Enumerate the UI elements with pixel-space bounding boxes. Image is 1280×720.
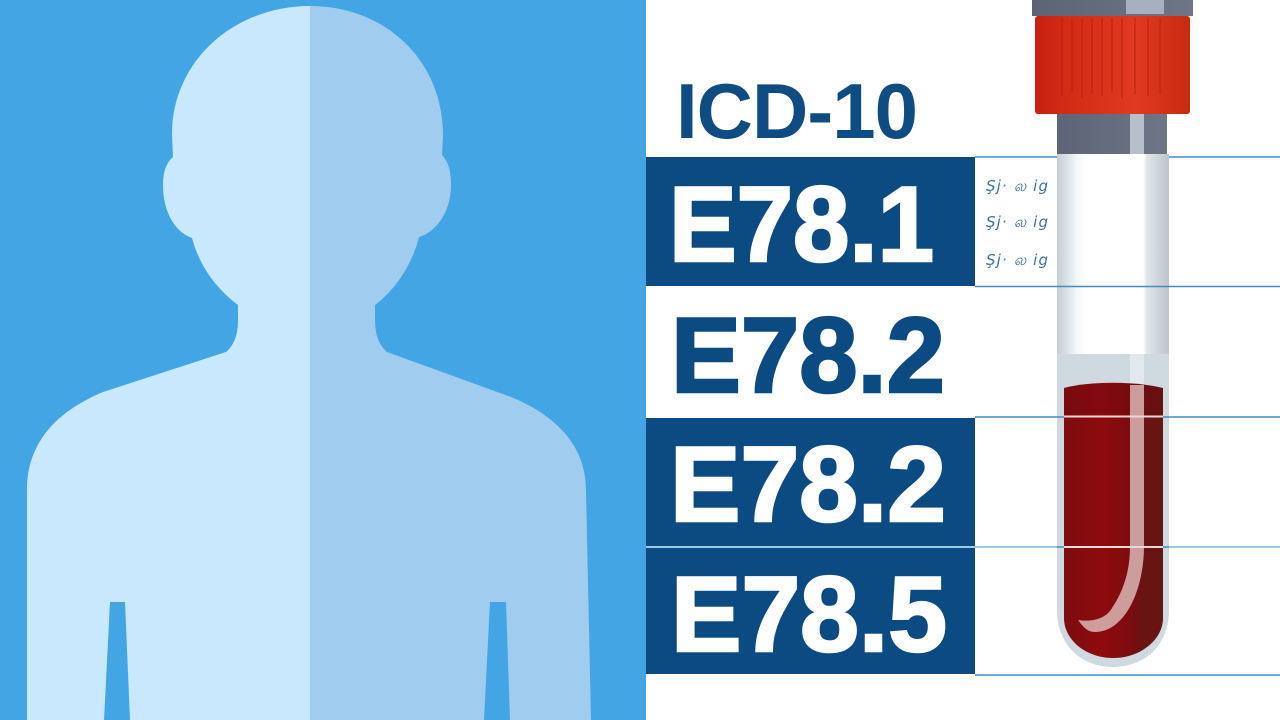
text block: small annotations [986,177,1048,269]
heading: ICD-10: ICD-10 [676,67,918,155]
line across glass [1057,286,1169,547]
row: E78.1: E78.1 [669,164,934,284]
red cap [1035,16,1190,114]
panel: code table [646,157,975,674]
stopper neck [1057,113,1167,154]
row: E78.2 highlighted: E78.2 [670,424,946,544]
icon: blood test tube [1032,0,1193,667]
blood [1064,383,1163,658]
icon: human silhouette [27,6,591,720]
gray top [1032,0,1193,16]
glass highlight [1078,385,1144,632]
tube glass [1057,354,1169,667]
text block: small annotations: Şj· ல ig [986,251,1048,269]
text block: small annotations: Şj· ல ig [986,213,1048,231]
lines showing through blood [1064,416,1163,547]
text block: small annotations: Şj· ல ig [986,177,1048,195]
row: E78.5: E78.5 [671,554,947,674]
panel: blue background [0,0,646,720]
row: E78.2: E78.2 [671,295,945,415]
table lines [646,157,1280,675]
